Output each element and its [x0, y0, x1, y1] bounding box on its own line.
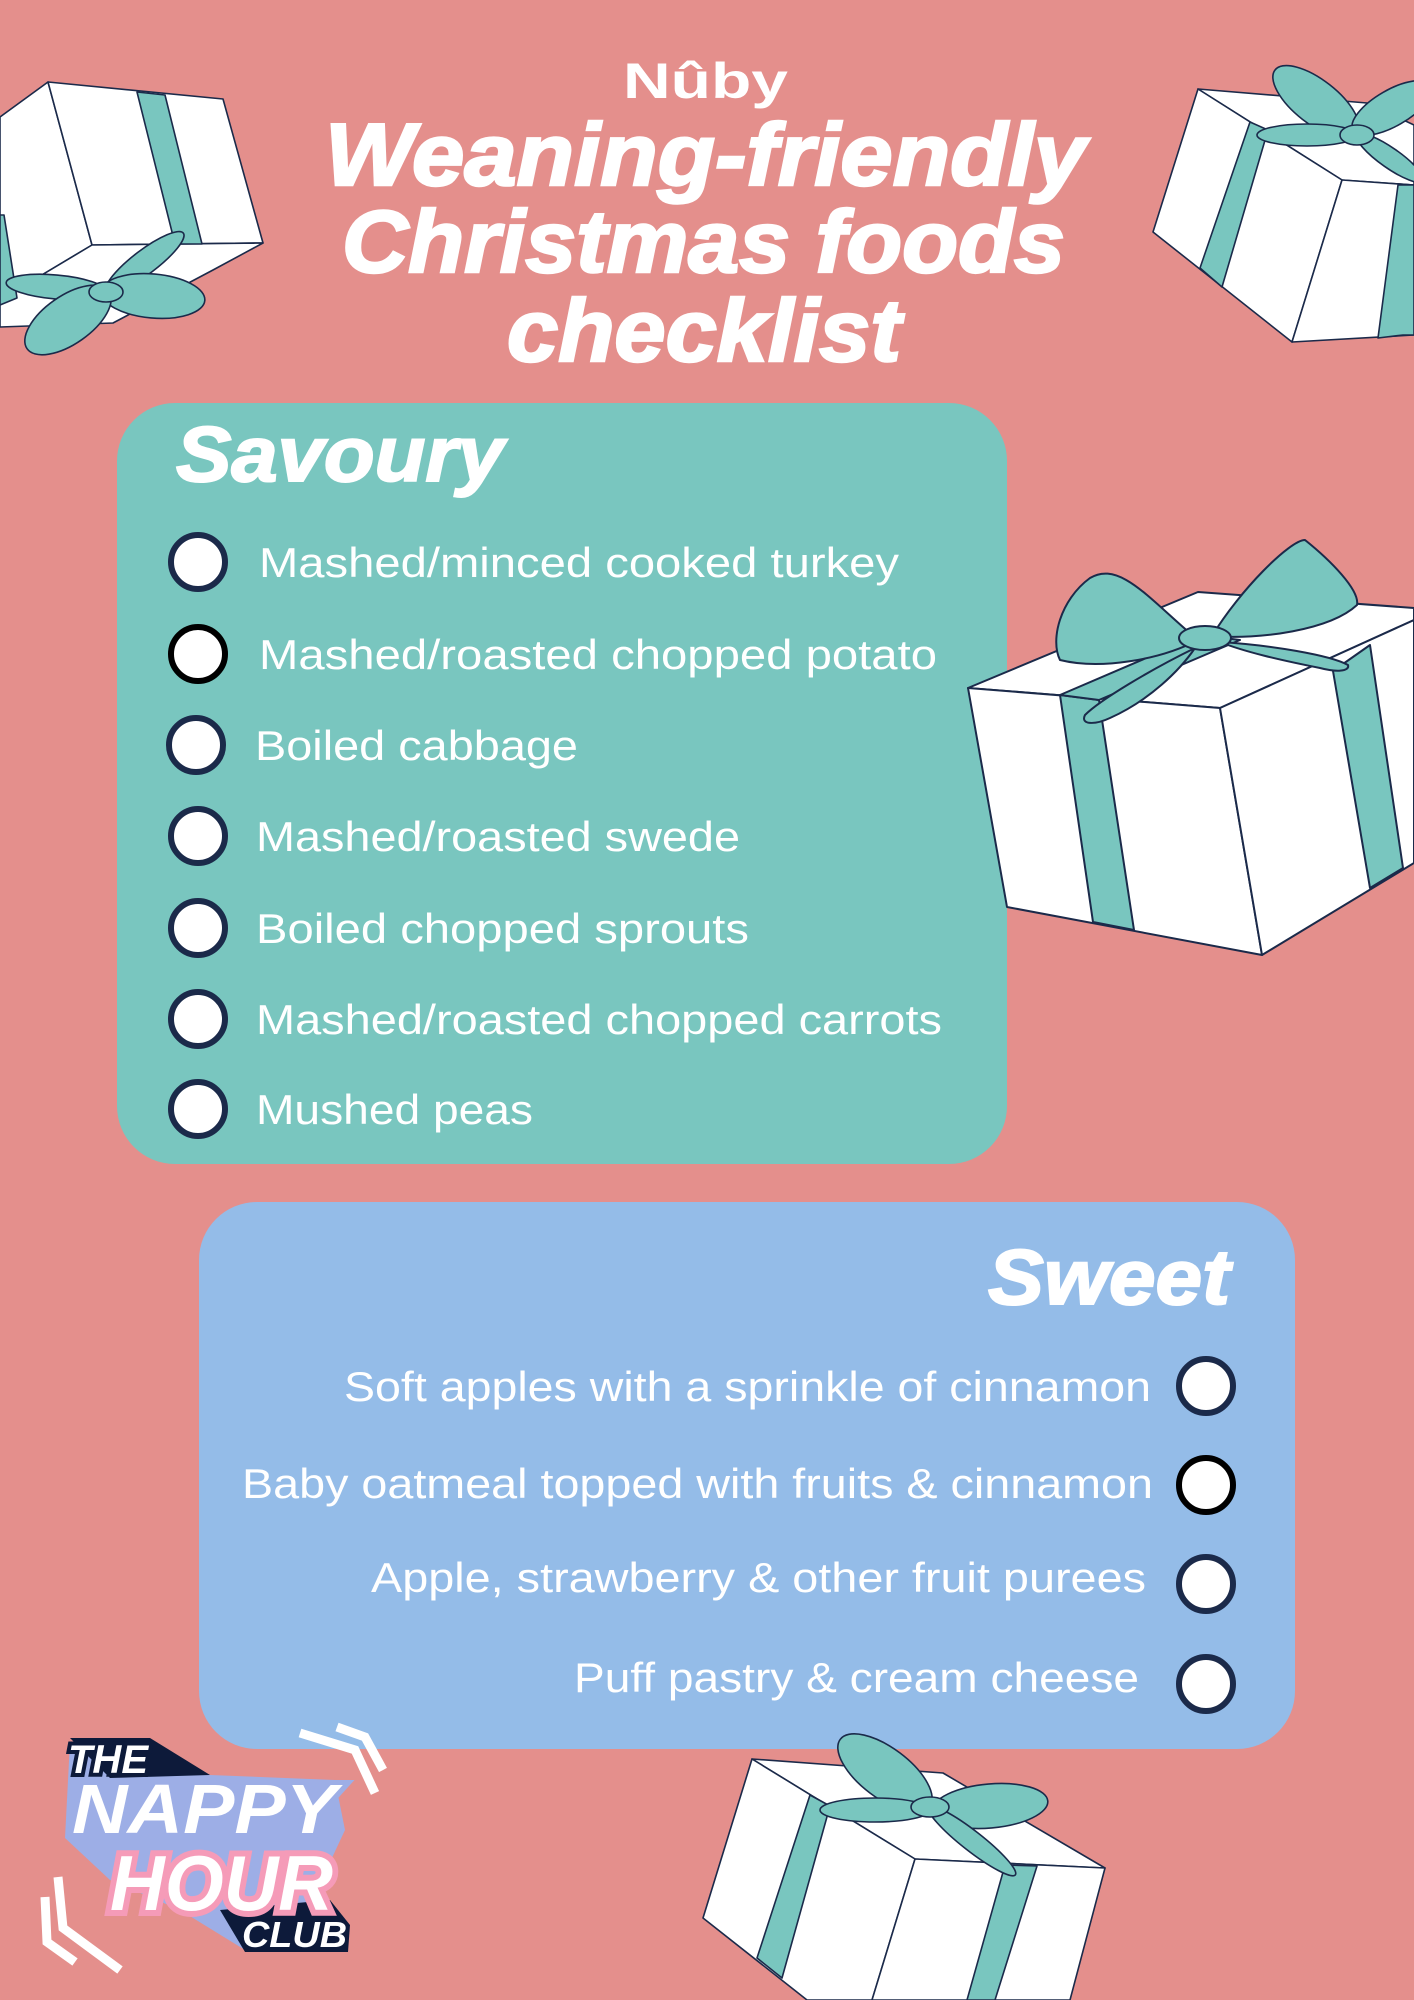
sweet checklist items — [242, 1359, 1233, 1711]
panel: savoury — [117, 403, 1007, 1164]
brand: Nuby: Nûby — [623, 53, 788, 109]
savoury checklist items: Boiled chopped sprouts — [256, 905, 749, 952]
heading: Savoury: Savoury — [176, 410, 508, 498]
icon: gift top-right — [1153, 53, 1414, 342]
logo: The Nappy Hour Club: CLUB — [242, 1914, 347, 1955]
savoury checklist items: Mashed/roasted chopped carrots — [256, 996, 942, 1043]
logo: The Nappy Hour Club — [45, 1727, 383, 1970]
icon: gift bottom — [703, 1719, 1105, 2000]
panel: sweet — [199, 1202, 1295, 1749]
sweet checklist items: Baby oatmeal topped with fruits & cinnamon — [242, 1460, 1153, 1507]
icon: gift middle-right — [968, 540, 1414, 955]
chevrons — [45, 1727, 383, 1970]
savoury checklist items: Mashed/minced cooked turkey — [259, 539, 899, 586]
savoury checklist items — [169, 535, 942, 1136]
sweet checklist items: Apple, strawberry & other fruit purees — [371, 1554, 1146, 1601]
title: Christmas foods — [342, 192, 1065, 291]
sweet checklist items: Puff pastry & cream cheese — [574, 1654, 1139, 1701]
savoury checklist items: Mashed/roasted swede — [256, 813, 740, 860]
savoury checklist items: Mashed/roasted chopped potato — [259, 631, 937, 678]
title — [325, 105, 1090, 380]
savoury checklist items: Boiled cabbage — [255, 722, 578, 769]
icon: gift top-left — [0, 82, 263, 368]
logo: The Nappy Hour Club: HOUR — [110, 1839, 333, 1927]
title: Weaning-friendly — [325, 105, 1090, 204]
logo: The Nappy Hour Club: THE — [68, 1738, 149, 1782]
heading: Sweet: Sweet — [988, 1233, 1233, 1321]
title: checklist — [507, 281, 905, 380]
savoury checklist items: Mushed peas — [256, 1086, 533, 1133]
sweet checklist items: Soft apples with a sprinkle of cinnamon — [344, 1363, 1151, 1410]
logo: The Nappy Hour Club: NAPPY — [72, 1770, 343, 1848]
